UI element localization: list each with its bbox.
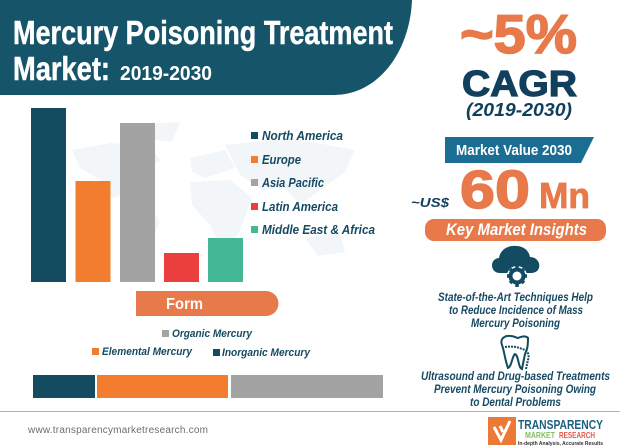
insight text 1 [438,292,593,330]
legend: form: Inorganic Mercury [222,347,311,359]
legend: regions [251,129,375,237]
title banner [0,0,412,95]
CAGR period: (2019-2030) [466,100,572,120]
legend: regions: North America [262,129,343,143]
icon: tooth [501,336,529,369]
icon: cloud with gear [492,246,539,287]
market value amount: ~US$ [411,195,450,210]
logo [488,417,603,447]
insight text 2: Prevent Mercury Poisoning Owing [434,384,596,396]
form heading pill: Form [166,296,203,313]
key market insights pill: Key Market Insights [446,221,587,239]
form heading pill [136,291,278,316]
legend: form: Elemental Mercury [102,346,193,358]
market value amount: 60 [460,160,530,220]
logo mark [488,417,516,445]
insight text 2: to Dental Problems [470,397,561,409]
insight text 2 [421,371,610,409]
website url: www.transparencymarketresearch.com [27,425,208,436]
stacked bar: form [33,375,383,398]
legend: form: Organic Mercury [172,328,253,340]
insight text 1: Mercury Poisoning [471,318,560,330]
title years: 2019-2030 [120,63,212,85]
insight text 1: State-of-the-Art Techniques Help [438,292,593,304]
market value banner [445,137,594,163]
world map background [72,122,355,264]
logo: MARKET [525,431,555,440]
legend: regions: Middle East & Africa [262,223,375,237]
legend: regions: Latin America [262,200,338,214]
legend: form [92,328,311,359]
title line 2: Market: [13,50,110,87]
CAGR value: ~5% [460,3,577,65]
bar chart: regions [31,108,243,282]
legend: regions: Europe [262,153,301,167]
market value amount [411,160,590,220]
title line 1: Mercury Poisoning Treatment [13,14,393,51]
market value banner: Market Value 2030 [456,143,572,159]
insight text 1: to Reduce Incidence of Mass [449,305,583,317]
logo: RESEARCH [559,431,595,440]
CAGR label: CAGR [462,63,577,104]
market value amount: Mn [539,175,590,216]
logo: In-depth Analysis, Accurate Results [518,441,603,447]
legend: regions: Asia Pacific [261,176,324,190]
